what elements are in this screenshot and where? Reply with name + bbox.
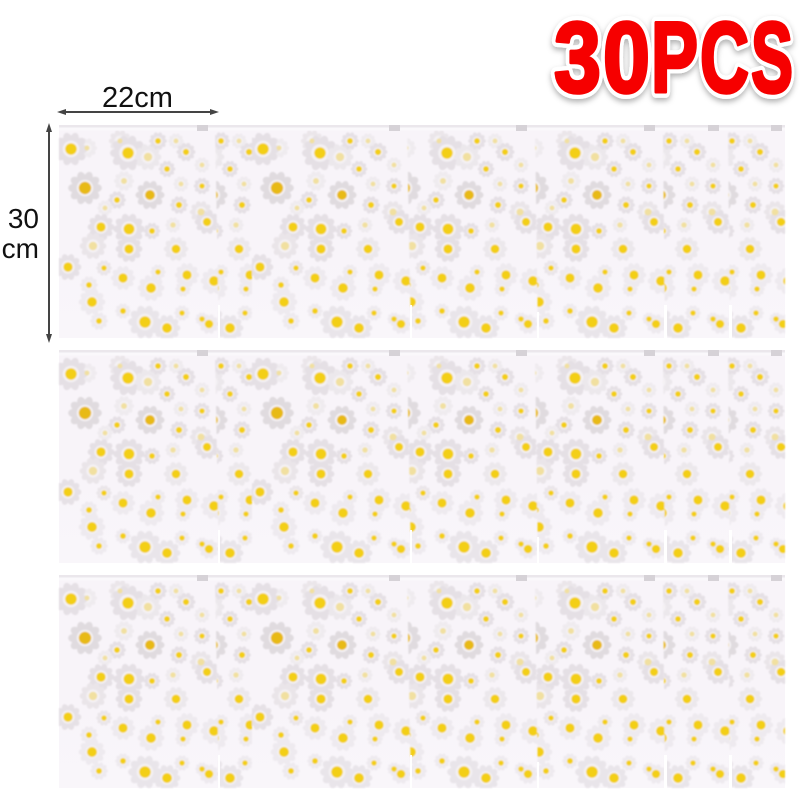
arrow: width dimension [57,109,219,115]
title badge: 30PCS: P [651,2,698,114]
arrow: height dimension [46,123,52,343]
bag row 1: daisy bags [54,125,800,342]
title badge: 30PCS: C [700,2,749,114]
bag row 3: daisy bags [54,575,800,792]
title badge: 30PCS: 3 [554,2,601,114]
height label: 30 cm [2,203,39,264]
width label: 22cm: 22cm [102,82,173,114]
height label: 30 cm: 30 [8,203,39,234]
height label: 30 cm: cm [2,233,39,264]
title badge: 30PCS: P [651,2,698,114]
bag row 2: daisy bags [54,350,800,567]
title badge: 30PCS: 0 [603,2,650,114]
title badge: 30PCS [554,2,793,114]
title badge: 30PCS: C [700,2,749,114]
title badge: 30PCS: 3 [554,2,601,114]
title badge: 30PCS: 0 [603,2,650,114]
